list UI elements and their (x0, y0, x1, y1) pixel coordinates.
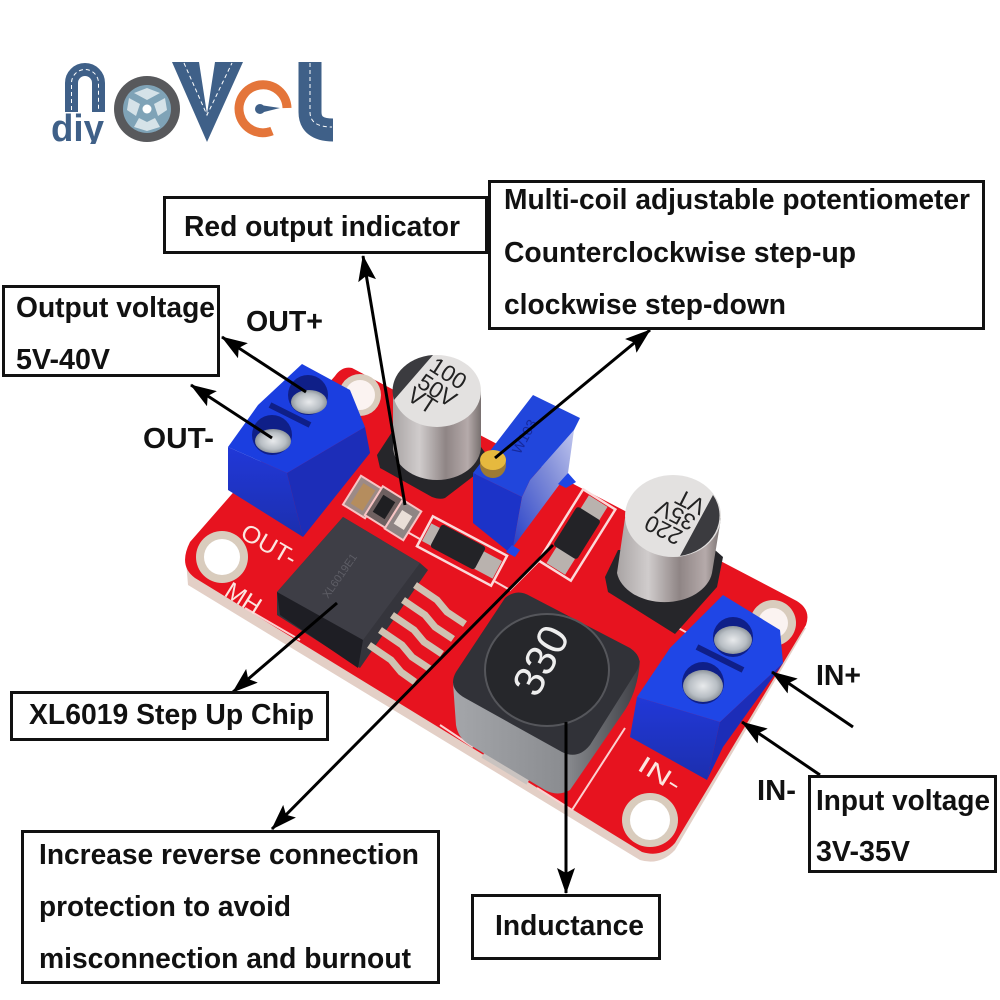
callout: input voltage: 3V-35V (816, 836, 911, 868)
callout: input voltage: Input voltage (816, 785, 990, 817)
callout: reverse connection protection: Increase reverse connection (39, 839, 419, 871)
logo letter n (72, 70, 98, 112)
bottom edge pad (483, 755, 528, 782)
arrow: reverse protection (272, 545, 553, 829)
capacitor 100uF: 50V (413, 368, 462, 413)
chip pins (369, 585, 465, 682)
arrow: IN+ (772, 672, 853, 727)
potentiometer (473, 395, 580, 557)
callout: potentiometer: clockwise step-down (504, 289, 786, 321)
callout: output voltage: 5V-40V (16, 344, 111, 376)
circuit board photo (185, 352, 807, 862)
capacitor 220uF: 220 (640, 510, 686, 550)
callout: reverse connection protection: protection to avoid (39, 891, 291, 923)
callout: output voltage (4, 286, 218, 376)
callout: reverse connection protection (22, 832, 438, 982)
silk outlines (245, 525, 700, 810)
logo letter e gauge (239, 85, 287, 133)
callout: potentiometer: Counterclockwise step-up (504, 237, 856, 269)
callout: potentiometer: Multi-coil adjustable potentiometer (504, 184, 970, 216)
PCB edge (186, 560, 806, 862)
callout: potentiometer (490, 182, 984, 328)
callout: output voltage: Output voltage (16, 292, 215, 324)
callout: input voltage (810, 776, 996, 872)
silk labels: OUT- (236, 519, 301, 572)
capacitor 220uF: VT (671, 484, 709, 520)
right blue terminal IN (630, 595, 783, 780)
label: IN+: IN+ (816, 660, 861, 692)
inductor 330 (453, 592, 640, 794)
arrow: IN- (742, 722, 820, 775)
diode 1 (417, 516, 507, 586)
silk labels (220, 519, 686, 798)
arrow: inductance (564, 722, 568, 893)
callout: red output indicator: Red output indicator (184, 211, 460, 243)
callout: step up chip (12, 692, 328, 740)
label: OUT-: OUT- (143, 423, 214, 455)
capacitor 100uF (377, 352, 492, 499)
callout: inductance: Inductance (495, 910, 644, 942)
SMD capacitor, resistor and LED (343, 476, 421, 540)
logo wheel (114, 76, 180, 142)
arrow: red indicator (363, 256, 405, 505)
capacitor 100uF: VT (403, 381, 442, 419)
capacitor 100uF: 100 (425, 352, 472, 395)
potentiometer: W103 (509, 416, 540, 456)
arrow: potentiometer (495, 330, 650, 458)
label: IN-: IN- (757, 775, 796, 807)
XL6019 chip (277, 517, 465, 682)
callout: reverse connection protection: misconnection and burnout (39, 943, 411, 975)
capacitor 220uF: 35V (651, 494, 700, 536)
arrow: step up chip (233, 603, 337, 692)
arrow: OUT+ (222, 337, 306, 392)
left blue terminal OUT (228, 364, 370, 537)
callout: inductance (472, 896, 660, 958)
callout: step up chip: XL6019 Step Up Chip (29, 699, 314, 731)
inductor 330: 330 (503, 618, 580, 704)
silk labels: MH (220, 577, 266, 620)
PCB red top (185, 368, 807, 854)
logo letter l (310, 62, 333, 130)
label: OUT+: OUT+ (246, 306, 323, 338)
callout: red output indicator (164, 198, 486, 252)
logo letter V (172, 62, 243, 142)
mounting holes (196, 374, 796, 847)
arrow: OUT- (191, 385, 272, 438)
logo small text diy: diy (51, 108, 104, 150)
XL6019 chip: XL6019E1 (321, 552, 360, 601)
diode 2 (539, 489, 615, 581)
logo: diy Novel (51, 62, 333, 150)
silk labels: IN- (633, 751, 686, 798)
capacitor 220uF (605, 475, 723, 634)
